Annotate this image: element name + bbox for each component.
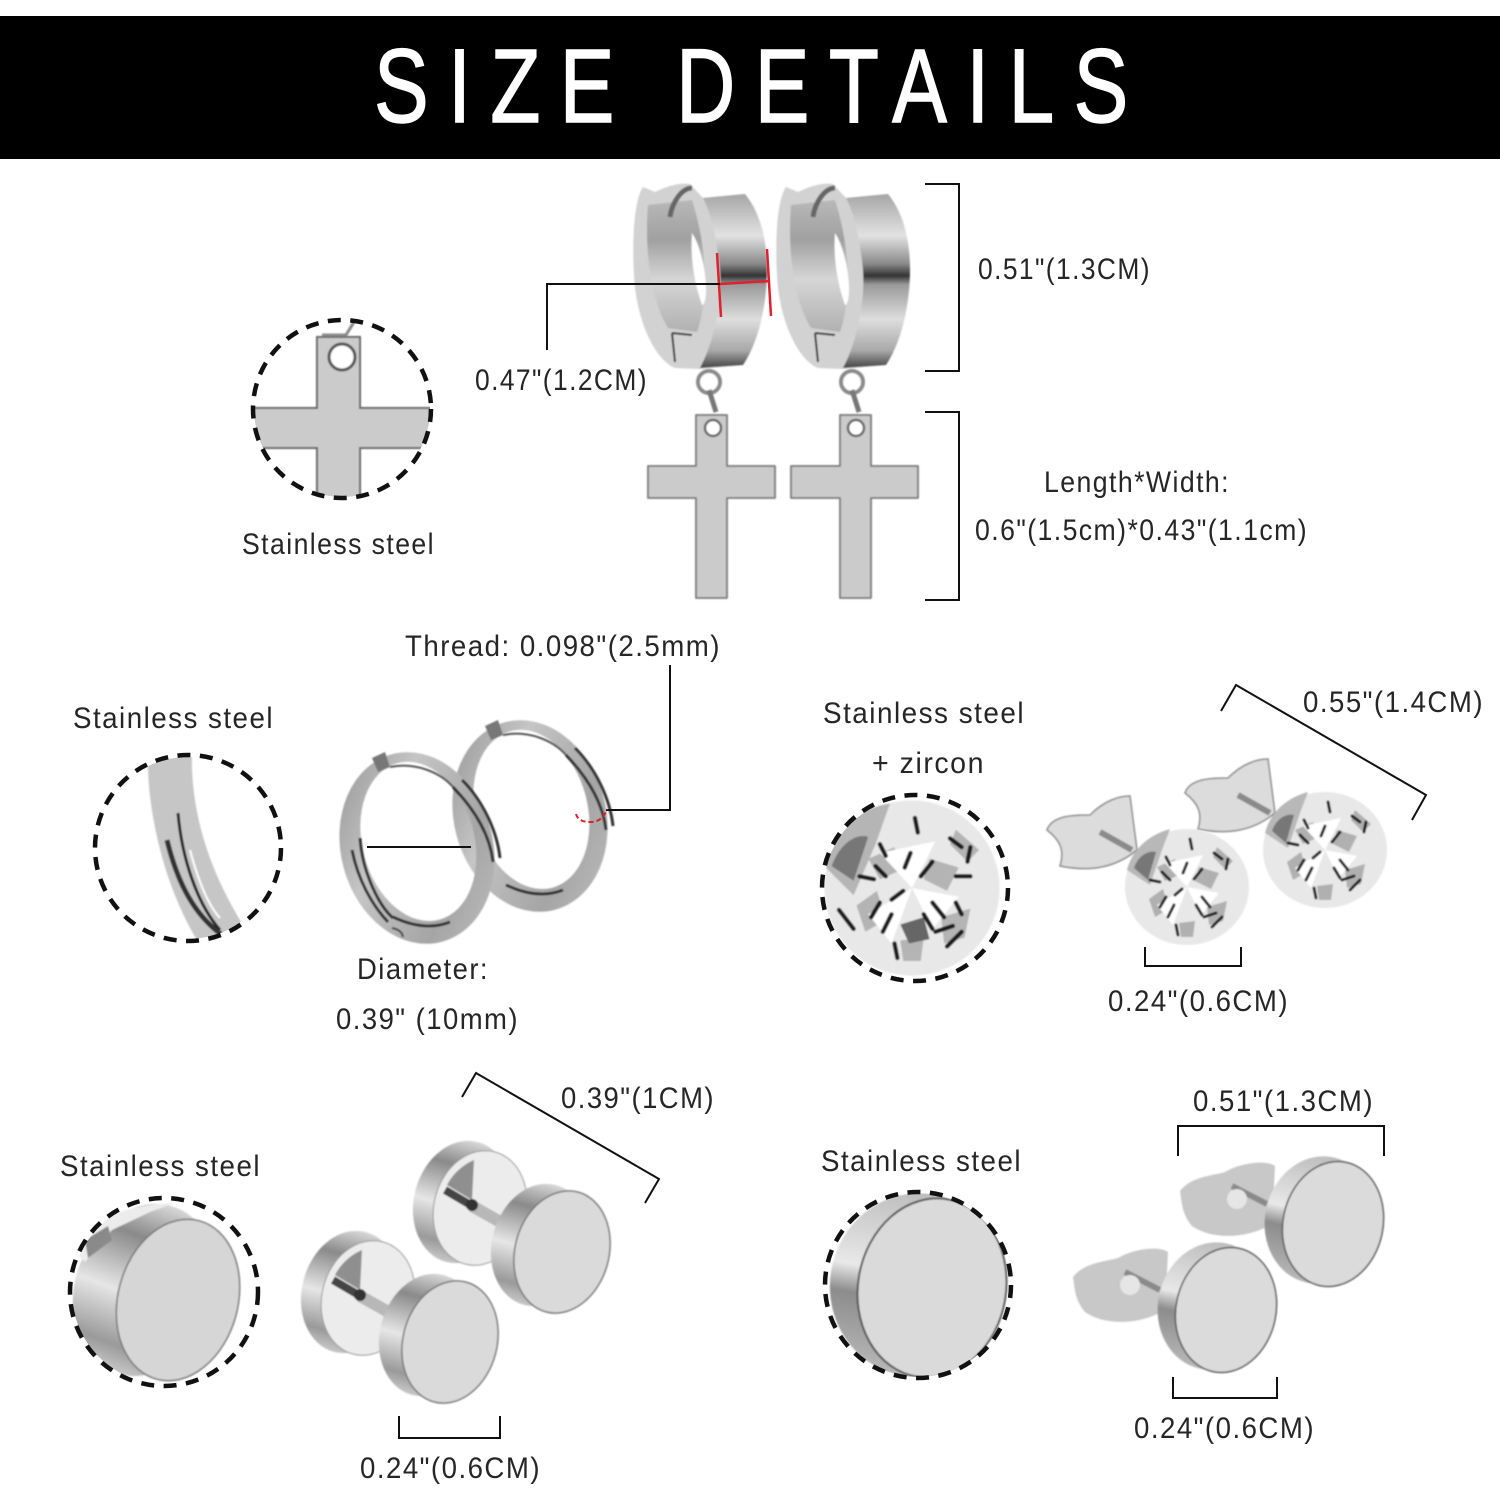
bracket: overall length (462, 1073, 659, 1203)
panel: dumbbell studs (49, 1073, 715, 1485)
bracket: overall length (1221, 685, 1426, 820)
title banner (0, 16, 1500, 159)
detail circle: dumbbell (68, 1196, 260, 1388)
label: diameter value: 0.39" (10mm) (336, 1003, 519, 1036)
label: disc size: 0.24"(0.6CM) (360, 1452, 541, 1485)
detail circle: zircon (822, 795, 1008, 981)
red marker: thread (576, 809, 607, 822)
panel: cross hoop earrings (242, 184, 1308, 600)
icon: cross hoop earring left (633, 184, 775, 598)
bracket: cross height (925, 412, 959, 600)
detail circle: hoop (95, 752, 281, 945)
panel: zircon studs (822, 685, 1484, 1018)
label: disc size: 0.24"(0.6CM) (1134, 1412, 1315, 1445)
bracket: hoop height (925, 184, 959, 371)
leader line: diameter (367, 846, 471, 848)
icon: hoop earring back (431, 703, 629, 929)
detail circle: flat (822, 1190, 1014, 1380)
label: overall width: 0.51"(1.3CM) (1193, 1085, 1374, 1118)
label: material flat: Stainless steel (821, 1145, 1022, 1178)
label: overall length: 0.55"(1.4CM) (1303, 686, 1484, 719)
icon: flat stud back (1180, 1146, 1395, 1296)
icon: dumbbell stud front (288, 1220, 511, 1414)
label: material hoop: Stainless steel (73, 702, 274, 735)
icon: cross hoop earring right (776, 184, 918, 598)
icon: flat stud front (1073, 1232, 1288, 1382)
leader line: thread (606, 665, 670, 810)
label: cross size: Length*Width: (1044, 466, 1230, 499)
leader line: band width (547, 284, 720, 350)
label: cross size value: 0.6"(1.5cm)*0.43"(1.1cm) (975, 514, 1308, 547)
label: diameter: Diameter: (357, 953, 489, 986)
panel: small hoop earrings (73, 630, 721, 1036)
icon: zircon stud back (1185, 759, 1387, 908)
panel: flat studs (815, 1085, 1395, 1445)
bracket: stone size (1145, 947, 1241, 966)
label: material zircon: Stainless steel (823, 697, 1025, 730)
bracket: overall width (1178, 1126, 1384, 1156)
bracket: disc size (1173, 1377, 1277, 1398)
title banner: SIZE DETAILS (374, 27, 1128, 144)
label: material dumbbell: Stainless steel (60, 1150, 261, 1183)
bracket: disc size (399, 1416, 500, 1438)
red measure: band width (717, 249, 771, 317)
label: zircon: + zircon (872, 747, 985, 780)
detail circle: cross (250, 320, 431, 510)
label: overall length: 0.39"(1CM) (561, 1082, 715, 1115)
icon: zircon stud front (1047, 796, 1249, 945)
label: material cross: Stainless steel (242, 528, 435, 561)
label: stone size: 0.24"(0.6CM) (1108, 985, 1289, 1018)
label: thread: Thread: 0.098"(2.5mm) (405, 630, 721, 663)
label: band width: 0.47"(1.2CM) (475, 364, 648, 397)
icon: dumbbell stud back (400, 1130, 623, 1324)
icon: hoop earring front (318, 735, 516, 961)
label: hoop height: 0.51"(1.3CM) (978, 253, 1151, 286)
